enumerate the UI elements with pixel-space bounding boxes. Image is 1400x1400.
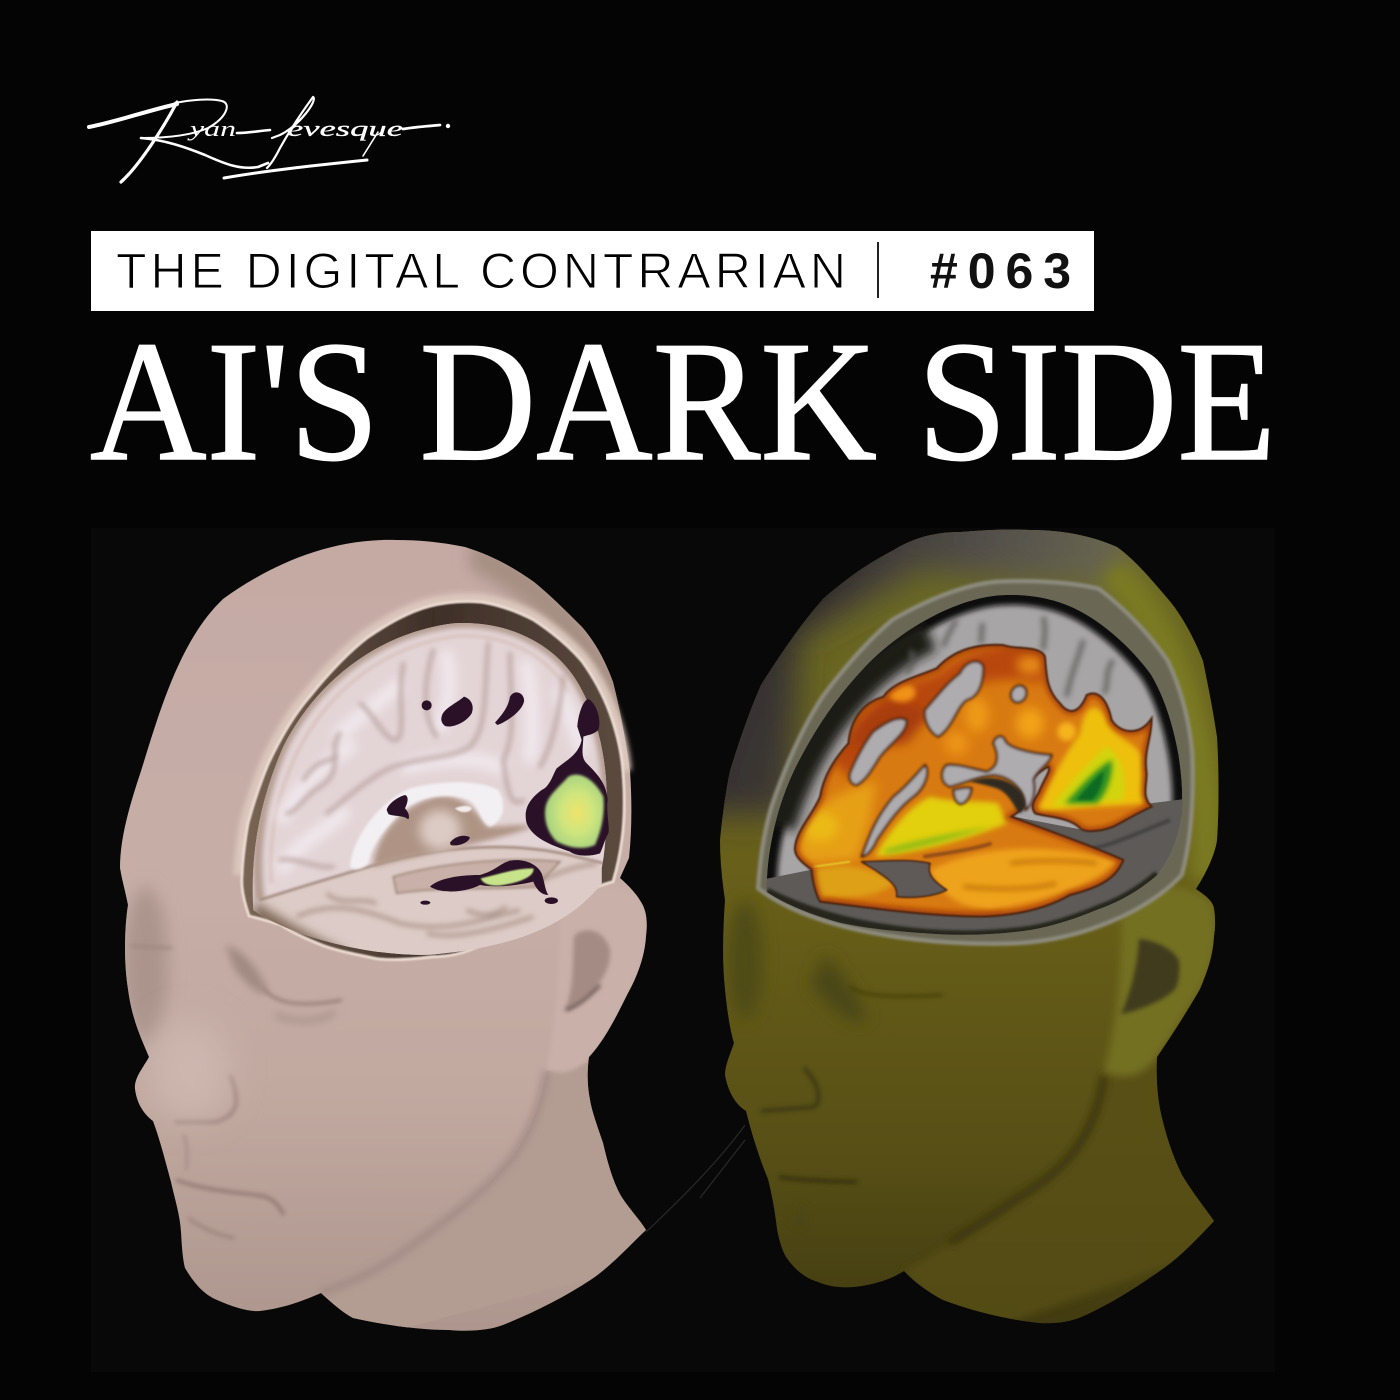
dark curved shadow in activation — [970, 778, 1025, 813]
dark lower basal area — [766, 799, 1182, 935]
brain tissue — [253, 623, 607, 955]
logo: Ryan Levesque signature: yan — [187, 116, 236, 141]
lower orange band — [930, 849, 1117, 910]
activation outline — [795, 645, 1152, 917]
dark inner edge — [767, 595, 1182, 892]
thalamus region — [373, 796, 533, 867]
title: AI'S DARK SIDE — [90, 307, 1276, 497]
sulci — [280, 643, 563, 867]
orange activation — [792, 642, 1154, 918]
right edge olive band — [1100, 560, 1222, 880]
series name: THE DIGITAL CONTRARIAN — [116, 243, 846, 299]
yellow green fields — [875, 797, 1007, 857]
right brain: fMRI cross-section — [758, 581, 1193, 967]
gyri highlights — [283, 657, 580, 867]
grey shell crown — [721, 530, 1142, 832]
left brain: cross-section — [242, 601, 624, 960]
inner edge glow — [795, 645, 1152, 917]
corpus callosum — [350, 782, 503, 869]
right ear — [1104, 887, 1216, 1076]
wide dark shading on upper left — [780, 637, 930, 827]
activation holes showing gray brain — [850, 662, 1052, 857]
skull lip around cut-out — [242, 601, 623, 875]
logo: Ryan Levesque signature: evesque — [287, 116, 403, 141]
grey band around opening — [758, 581, 1193, 944]
gyri shading — [907, 617, 1113, 697]
fMRI spot: frontal green activation — [545, 775, 604, 848]
left head: pink, normal brain — [120, 540, 660, 1340]
issue number: #063 — [930, 243, 1071, 299]
right head: olive, active brain — [720, 530, 1218, 1324]
series banner — [91, 231, 1094, 311]
logo: Ryan Levesque signature — [89, 97, 450, 182]
brainstem and cerebellum — [250, 847, 603, 960]
left ear — [546, 887, 646, 1072]
gray gap in lower area — [862, 861, 947, 897]
fMRI spots: dark blobs — [387, 692, 609, 905]
image panel: two head scans — [120, 530, 1218, 1331]
inner rim shading — [258, 623, 607, 900]
fMRI spot: lower green activation — [481, 868, 533, 886]
skull cut-out with dark crescent — [242, 601, 624, 960]
